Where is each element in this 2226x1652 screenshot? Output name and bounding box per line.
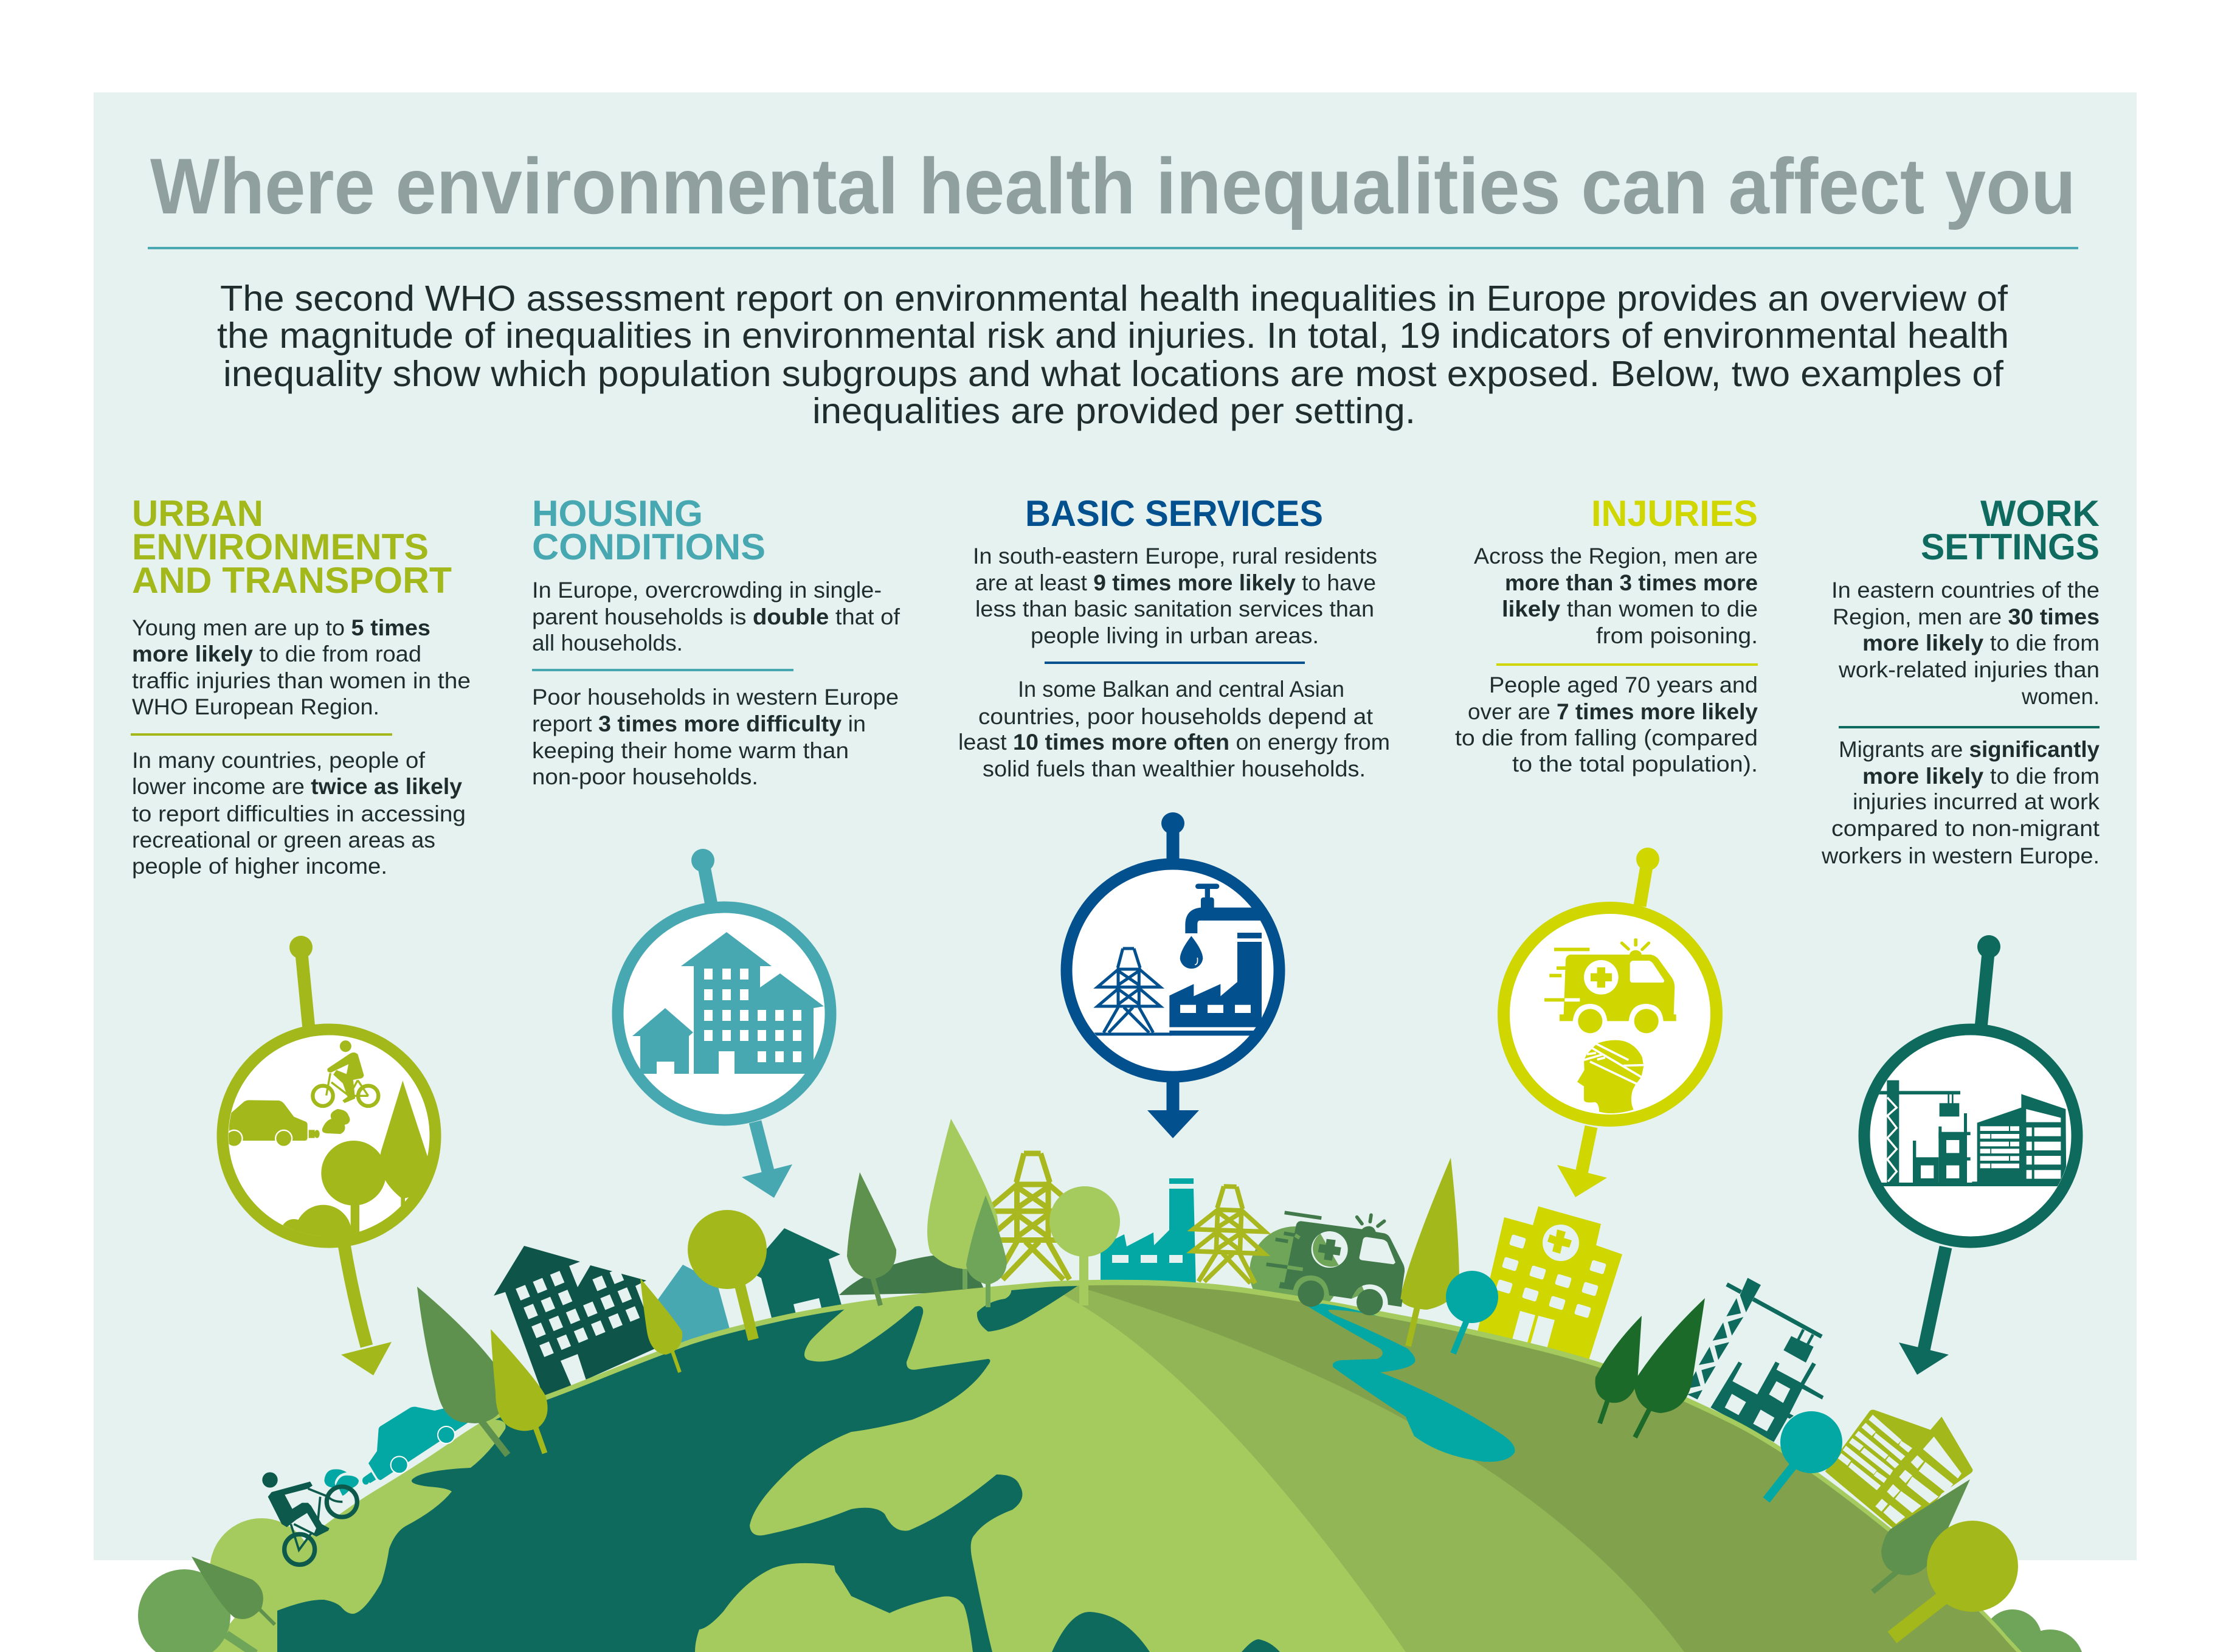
conifer: horizon B bbox=[927, 1119, 998, 1289]
text: road traffic injuries: more likely to die from road bbox=[132, 641, 421, 666]
tree: bottom left conifer bbox=[192, 1557, 275, 1625]
pin: injuries bbox=[1504, 848, 1716, 1197]
icon: tap, factory, pylon bbox=[1093, 883, 1265, 1035]
planet sea bbox=[277, 1283, 1022, 1652]
column: injuries bbox=[1455, 493, 1758, 776]
tree: teal right bbox=[1766, 1411, 1842, 1500]
text: poisoning: likely than women to die bbox=[1502, 596, 1758, 621]
text: overcrowding: parent households is double that of bbox=[532, 604, 900, 629]
planet shading bbox=[277, 1285, 2016, 1652]
construction crane and building bbox=[1686, 1278, 1823, 1442]
heading: urban environments and transport: URBAN bbox=[132, 493, 263, 534]
conifer: right horizon bbox=[1400, 1158, 1459, 1346]
title: Where environmental health inequalities can affect you bbox=[150, 142, 2076, 230]
text: road traffic injuries bbox=[132, 615, 471, 719]
pylon left bbox=[986, 1153, 1080, 1279]
text: falling: People aged 70 years and bbox=[1489, 672, 1758, 697]
heading: basic services: BASIC SERVICES bbox=[1025, 493, 1323, 534]
text: overcrowding: all households. bbox=[532, 631, 683, 655]
dark house bbox=[748, 1228, 842, 1322]
text: access to green areas: In many countries, people of bbox=[132, 748, 426, 773]
text: keeping home warm: Poor households in western Europe bbox=[532, 685, 899, 710]
text: falling: to die from falling (compared bbox=[1455, 725, 1758, 750]
text: sanitation: are at least 9 times more likely to have bbox=[975, 570, 1376, 595]
intro paragraph: The second WHO assessment report on environmental health inequalities in Europe provides an overview of bbox=[220, 278, 2008, 319]
icon: houses bbox=[632, 932, 824, 1074]
heading: housing conditions: CONDITIONS bbox=[532, 527, 766, 567]
text: overcrowding bbox=[532, 578, 900, 655]
text: sanitation: people living in urban areas. bbox=[1031, 623, 1319, 648]
car on slope bbox=[324, 1406, 468, 1496]
conifer: slope small bbox=[491, 1329, 548, 1453]
intro paragraph bbox=[217, 278, 2009, 431]
tree: bottom left round bbox=[138, 1569, 255, 1652]
planet land bbox=[207, 1280, 2022, 1652]
column: basic services bbox=[958, 493, 1390, 781]
text: work-related injuries: more likely to die from bbox=[1862, 631, 2100, 655]
cyclist on slope bbox=[262, 1472, 357, 1564]
tree: light round bbox=[1049, 1186, 1120, 1305]
text: access to green areas bbox=[132, 748, 466, 879]
text: work-related injuries: Region, men are 30 times bbox=[1833, 604, 2100, 629]
text: migrants: more likely to die from bbox=[1862, 764, 2100, 789]
text: work-related injuries: work-related injuries than bbox=[1838, 657, 2100, 682]
text: access to green areas: recreational or green areas as bbox=[132, 828, 435, 852]
text: overcrowding: In Europe, overcrowding in single- bbox=[532, 578, 882, 603]
text: access to green areas: to report difficulties in accessing bbox=[132, 801, 466, 826]
text: falling: over are 7 times more likely bbox=[1468, 699, 1758, 724]
text: migrants: Migrants are significantly bbox=[1839, 737, 2100, 762]
conifer: slope large bbox=[417, 1287, 508, 1455]
text: falling: to the total population). bbox=[1512, 752, 1758, 776]
text: sanitation bbox=[973, 544, 1377, 648]
pin: basic services bbox=[1066, 812, 1279, 1138]
conifer: lower right bbox=[1873, 1479, 1970, 1592]
text: keeping home warm: non-poor households. bbox=[532, 764, 758, 789]
column: work settings bbox=[1821, 493, 2100, 868]
dark conifers bbox=[1595, 1298, 1705, 1437]
heading: housing conditions: HOUSING bbox=[532, 493, 703, 534]
text: sanitation: less than basic sanitation services than bbox=[975, 596, 1374, 621]
text: migrants bbox=[1821, 737, 2100, 868]
tree: olive lower right bbox=[1892, 1521, 2018, 1637]
hospital bbox=[1478, 1206, 1622, 1362]
text: migrants: workers in western Europe. bbox=[1821, 843, 2100, 868]
planet lake bbox=[977, 1286, 1077, 1332]
pylon right bbox=[1192, 1185, 1267, 1284]
heading: injuries: INJURIES bbox=[1591, 493, 1758, 534]
text: keeping home warm bbox=[532, 685, 899, 789]
heading: work settings bbox=[1921, 493, 2100, 567]
text: access to green areas: lower income are twice as likely bbox=[132, 774, 462, 799]
conifer: horizon C bbox=[966, 1195, 1007, 1307]
apartment buildings bbox=[494, 1246, 659, 1398]
intro paragraph: inequalities are provided per setting. bbox=[812, 391, 1415, 431]
low hill bbox=[839, 1255, 985, 1295]
text: work-related injuries: women. bbox=[2021, 684, 2100, 709]
text: access to green areas: people of higher income. bbox=[132, 854, 387, 879]
intro paragraph: inequality show which population subgroups and what locations are most exposed. Below, two examples of bbox=[223, 354, 2004, 394]
teal house bbox=[657, 1265, 732, 1350]
bush: bottom left bbox=[210, 1518, 313, 1622]
pin: housing conditions bbox=[618, 849, 831, 1198]
text: keeping home warm: keeping their home warm than bbox=[532, 738, 849, 763]
icon: crane and buildings bbox=[1877, 1080, 2066, 1186]
text: work-related injuries bbox=[1831, 578, 2100, 709]
text: road traffic injuries: Young men are up to 5 times bbox=[132, 615, 430, 640]
river bbox=[1307, 1304, 1515, 1462]
conifer: beside apartments bbox=[640, 1278, 682, 1372]
text: work-related injuries: In eastern countries of the bbox=[1831, 578, 2100, 603]
text: sanitation: In south-eastern Europe, rural residents bbox=[973, 544, 1377, 569]
heading: work settings: WORK bbox=[1980, 493, 2100, 534]
conifer: horizon A bbox=[847, 1172, 896, 1305]
text: poisoning: more than 3 times more bbox=[1505, 570, 1758, 595]
tree: teal round bbox=[1446, 1271, 1498, 1353]
heading: urban environments and transport: ENVIRONMENTS bbox=[132, 527, 429, 567]
text: migrants: compared to non-migrant bbox=[1831, 816, 2100, 841]
text: solid fuels: solid fuels than wealthier households. bbox=[983, 756, 1366, 781]
planet bbox=[213, 1279, 2022, 1652]
intro paragraph: the magnitude of inequalities in environmental risk and injuries. In total, 19 indicators of environmental health bbox=[217, 316, 2009, 356]
text: solid fuels: least 10 times more often on energy from bbox=[958, 730, 1390, 755]
text: falling bbox=[1455, 672, 1758, 776]
heading: urban environments and transport bbox=[132, 493, 452, 601]
text: road traffic injuries: WHO European Region. bbox=[132, 694, 379, 719]
heading: housing conditions bbox=[532, 493, 766, 567]
text: solid fuels bbox=[958, 677, 1390, 781]
text: poisoning: Across the Region, men are bbox=[1474, 544, 1758, 569]
text: solid fuels: In some Balkan and central Asian bbox=[1018, 677, 1344, 702]
office building bbox=[1825, 1409, 1972, 1532]
horizon scenery behind the planet bbox=[210, 1153, 2084, 1652]
tree: olive round bbox=[688, 1210, 767, 1339]
heading: work settings: SETTINGS bbox=[1921, 527, 2100, 567]
ambulance on horizon bbox=[1267, 1212, 1405, 1315]
text: poisoning bbox=[1474, 544, 1758, 648]
bushes: bottom right bbox=[1983, 1609, 2084, 1652]
green bush behind ambulance bbox=[1250, 1226, 1341, 1318]
factory bbox=[1101, 1178, 1196, 1289]
icon: cyclist, car, trees bbox=[229, 1040, 427, 1237]
text: migrants: injuries incurred at work bbox=[1853, 789, 2100, 814]
pin: urban environments and transport bbox=[223, 936, 435, 1375]
text: poisoning: from poisoning. bbox=[1596, 623, 1758, 648]
text: solid fuels: countries, poor households depend at bbox=[978, 704, 1374, 729]
text: keeping home warm: report 3 times more difficulty in bbox=[532, 711, 866, 736]
icon: ambulance and bandaged head bbox=[1544, 938, 1676, 1113]
heading: urban environments and transport: AND TRANSPORT bbox=[132, 560, 452, 601]
text: road traffic injuries: traffic injuries than women in the bbox=[132, 668, 471, 693]
column: housing conditions bbox=[532, 493, 900, 789]
column: urban environments and transport bbox=[131, 493, 471, 879]
pin: work settings bbox=[1864, 935, 2077, 1375]
